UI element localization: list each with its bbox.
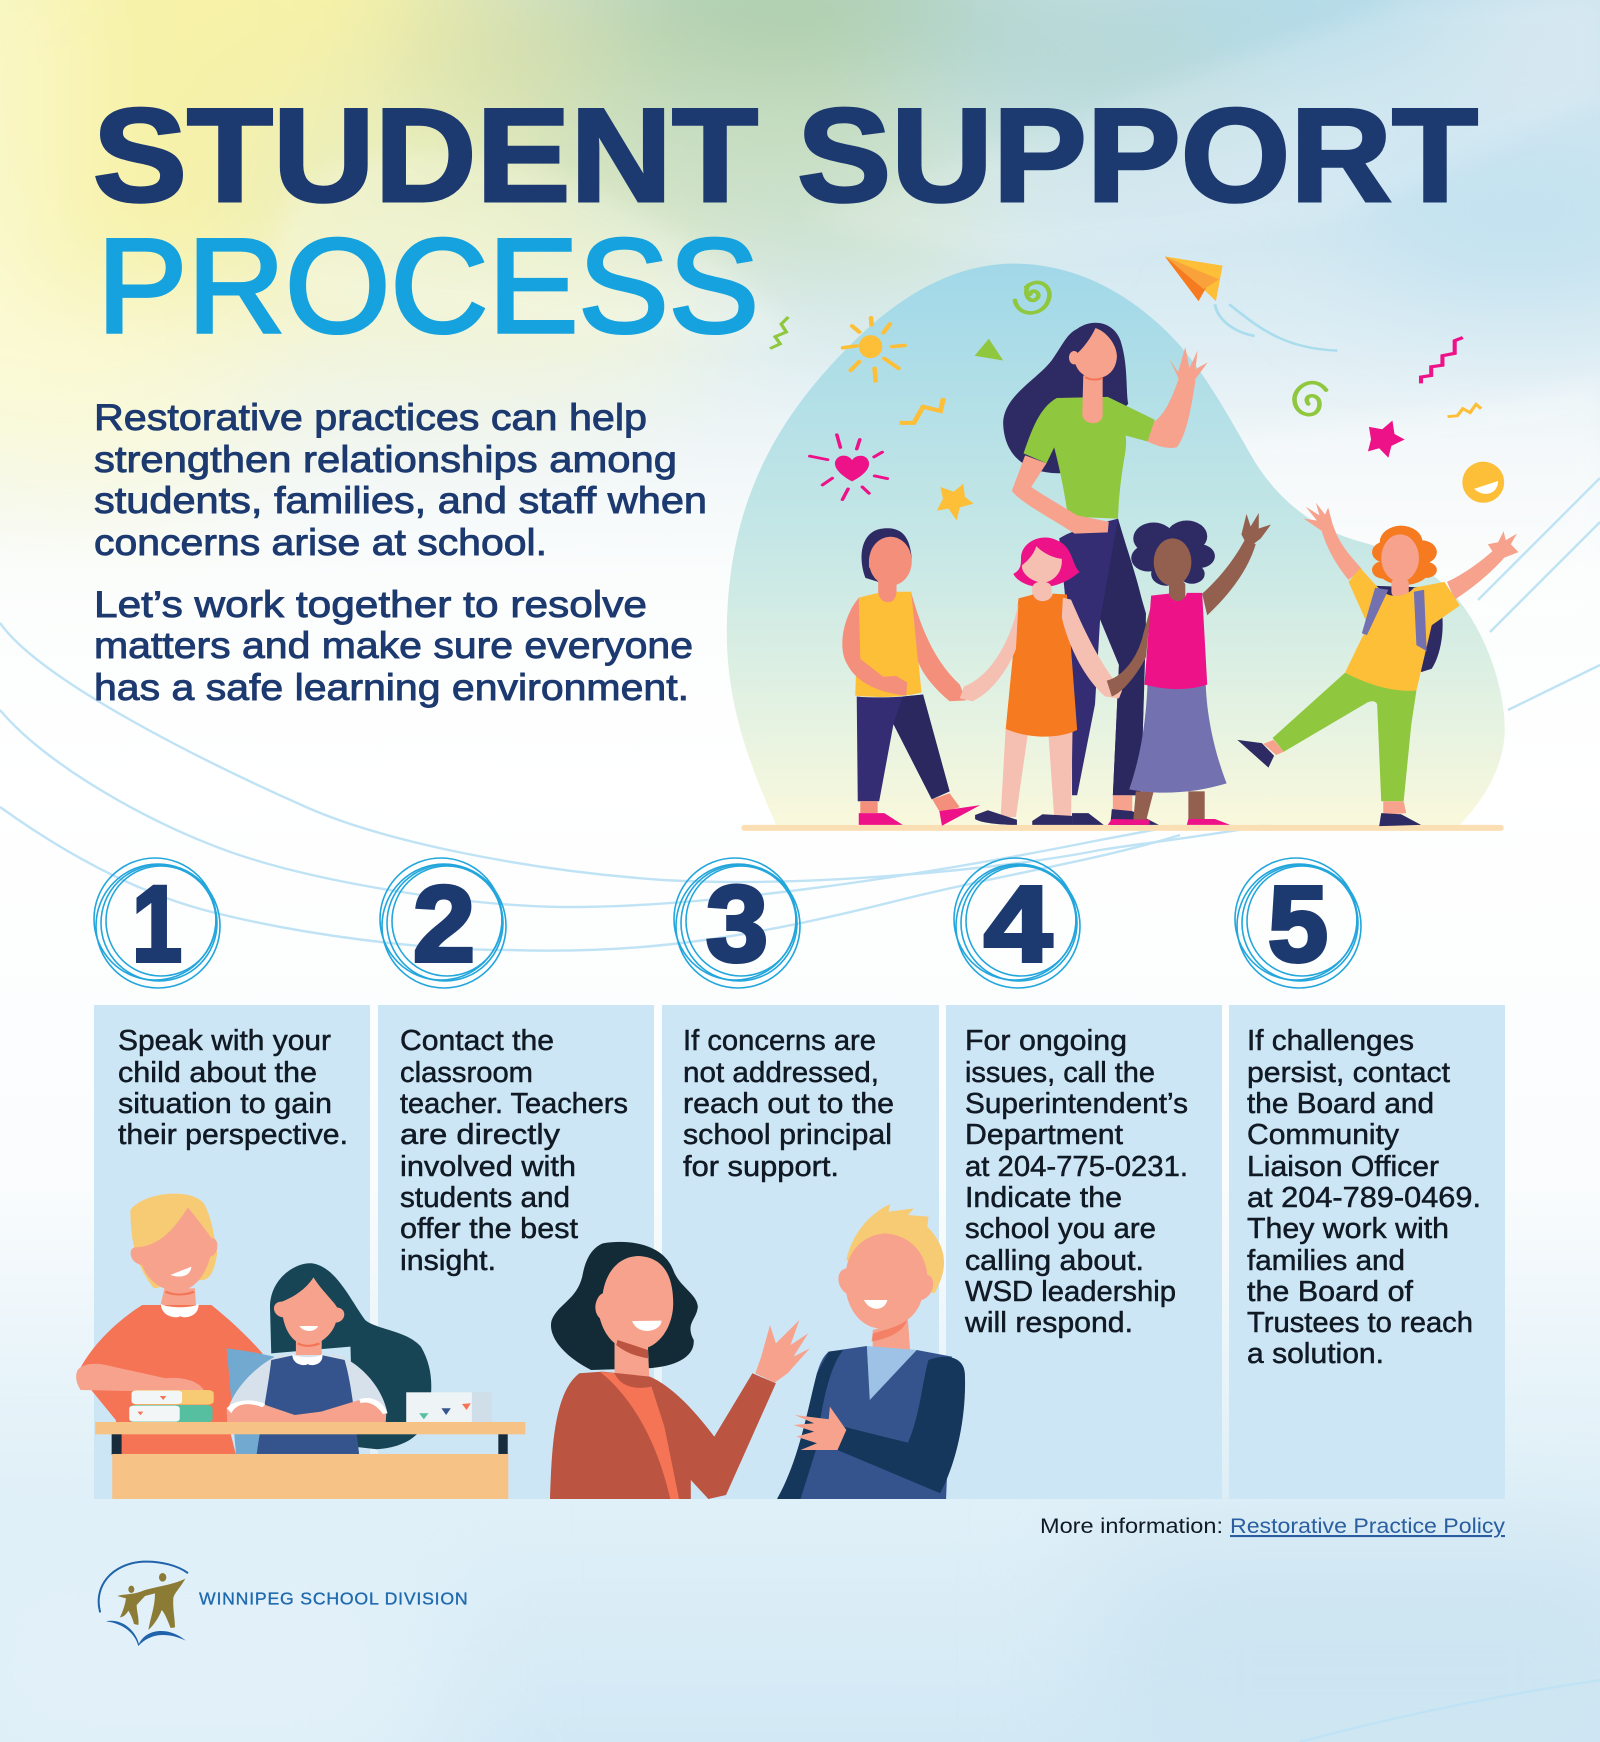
step 3 text: school principal <box>683 1119 892 1151</box>
badge 1 <box>94 858 220 988</box>
paragraph 1 <box>94 397 707 563</box>
sun <box>843 318 905 381</box>
panel: step 1 <box>94 1005 370 1499</box>
step 4 text: will respond. <box>964 1307 1133 1339</box>
title line: student support: STUDENT SUPPORT <box>93 82 1478 230</box>
step 5 text <box>1247 1025 1481 1370</box>
paper stack <box>406 1392 492 1422</box>
step 5 text: If challenges <box>1247 1025 1414 1057</box>
step 4 text: Department <box>965 1119 1123 1151</box>
step 3 text: for support. <box>683 1151 839 1183</box>
paragraph 2: has a safe learning environment. <box>94 667 689 708</box>
logo: Winnipeg School Division <box>99 1562 468 1646</box>
child 4: boy with backpack <box>1237 503 1518 826</box>
step 4 text: school you are <box>965 1213 1156 1245</box>
illustration: teacher and children with doodles <box>727 256 1518 831</box>
floor line <box>741 825 1504 831</box>
badge 5 <box>1235 858 1361 988</box>
logo arc <box>99 1562 187 1612</box>
panel: step 2 <box>378 1005 654 1499</box>
step 4 text: Superintendent’s <box>965 1088 1188 1120</box>
logo figures <box>117 1573 185 1630</box>
child 1: boy with yellow shirt <box>842 528 980 826</box>
step 5 text: at 204-789-0469. <box>1247 1182 1481 1214</box>
logo wordmark: WINNIPEG SCHOOL DIVISION <box>199 1589 468 1609</box>
paragraph 2: Let’s work together to resolve <box>94 584 647 625</box>
child 3: girl with pink top <box>1107 513 1271 825</box>
step 3 text: If concerns are <box>683 1025 876 1057</box>
policy link: Restorative Practice Policy <box>1230 1515 1506 1538</box>
green spiral 1 <box>1015 282 1049 313</box>
yellow star 1 <box>937 484 974 521</box>
badge 1: 1 <box>132 863 182 984</box>
numbered badges <box>94 858 1361 988</box>
doodles <box>770 256 1504 521</box>
step 4 text: at 204-775-0231. <box>965 1151 1188 1183</box>
step 2 text: students and <box>400 1182 570 1214</box>
pink star <box>1368 421 1405 458</box>
heart with rays <box>810 435 887 500</box>
step 5 text: persist, contact <box>1247 1057 1450 1089</box>
step 5 text: Trustees to reach <box>1247 1307 1473 1339</box>
step 3 text: reach out to the <box>683 1088 894 1120</box>
step 2 text: offer the best <box>400 1213 578 1245</box>
logo swoosh <box>106 1621 186 1646</box>
step 4 text: WSD leadership <box>965 1276 1176 1308</box>
zigzag yellow <box>900 398 943 423</box>
badge 2 <box>380 858 506 988</box>
smile ball <box>1462 462 1504 503</box>
paragraph 2: matters and make sure everyone <box>94 625 693 666</box>
step 3 text <box>683 1025 894 1183</box>
step 2 text: are directly <box>400 1119 561 1151</box>
step 1 text: child about the <box>118 1057 317 1089</box>
blob backdrop <box>727 264 1505 825</box>
woman <box>1003 323 1208 825</box>
badge 3 <box>674 858 800 988</box>
green spiral 2 <box>1294 383 1326 415</box>
zigzag green <box>770 317 788 349</box>
panel: step 5 <box>1229 1005 1505 1499</box>
step 2 text: teacher. Teachers <box>400 1088 628 1120</box>
title <box>93 82 1478 361</box>
stacked books <box>129 1390 214 1422</box>
step 5 text: a solution. <box>1247 1338 1384 1370</box>
paragraph 1: concerns arise at school. <box>94 522 547 563</box>
step 2 text: classroom <box>400 1057 533 1089</box>
badge 4 <box>954 858 1080 988</box>
more information line: More information: <box>1040 1515 1223 1538</box>
pink zigzag <box>1421 338 1463 383</box>
paragraph 1: Restorative practices can help <box>94 397 647 438</box>
step 4 text: issues, call the <box>965 1057 1155 1089</box>
step 1 text <box>118 1025 348 1151</box>
badge 4: 4 <box>984 863 1052 984</box>
step 2 text: Contact the <box>400 1025 554 1057</box>
paragraph 1: students, families, and staff when <box>94 480 707 521</box>
more information line <box>1040 1515 1506 1538</box>
step 5 text: Liaison Officer <box>1247 1151 1440 1183</box>
step 4 text: calling about. <box>965 1245 1144 1277</box>
desk <box>95 1422 525 1499</box>
step 5 text: the Board and <box>1247 1088 1434 1120</box>
step 3 text: not addressed, <box>683 1057 879 1089</box>
step 4 text: For ongoing <box>965 1025 1127 1057</box>
illustration: teacher and student at desk <box>76 1194 965 1499</box>
woman talking <box>550 1242 810 1499</box>
step 4 text: Indicate the <box>965 1182 1122 1214</box>
intro text <box>94 397 707 708</box>
step 5 text: Community <box>1247 1119 1400 1151</box>
step 5 text: They work with <box>1247 1213 1449 1245</box>
teacher figure <box>76 1194 262 1455</box>
child 2: girl with orange dress <box>960 538 1122 825</box>
step 1 text: their perspective. <box>118 1119 348 1151</box>
paper plane <box>1165 256 1223 301</box>
plane trail <box>1215 304 1337 351</box>
badge 5: 5 <box>1268 863 1328 984</box>
small yellow zigzag <box>1448 404 1481 417</box>
paragraph 1: strengthen relationships among <box>94 439 677 480</box>
step 5 text: the Board of <box>1247 1276 1413 1308</box>
student figure <box>227 1263 431 1455</box>
man talking <box>777 1204 965 1499</box>
paragraph 2 <box>94 584 693 708</box>
green triangle <box>975 339 1003 360</box>
step 4 text <box>964 1025 1188 1339</box>
step 2 text: involved with <box>400 1151 576 1183</box>
badge 2: 2 <box>413 863 475 984</box>
panel: step 4 <box>946 1005 1222 1499</box>
badge 3: 3 <box>706 863 768 984</box>
step 2 text <box>400 1025 628 1277</box>
step 1 text: situation to gain <box>118 1088 332 1120</box>
panel: step 3 <box>662 1005 939 1499</box>
title line: process: PROCESS <box>97 212 759 361</box>
step 1 text: Speak with your <box>118 1025 332 1057</box>
step 5 text: families and <box>1247 1245 1405 1277</box>
step 2 text: insight. <box>400 1245 496 1277</box>
